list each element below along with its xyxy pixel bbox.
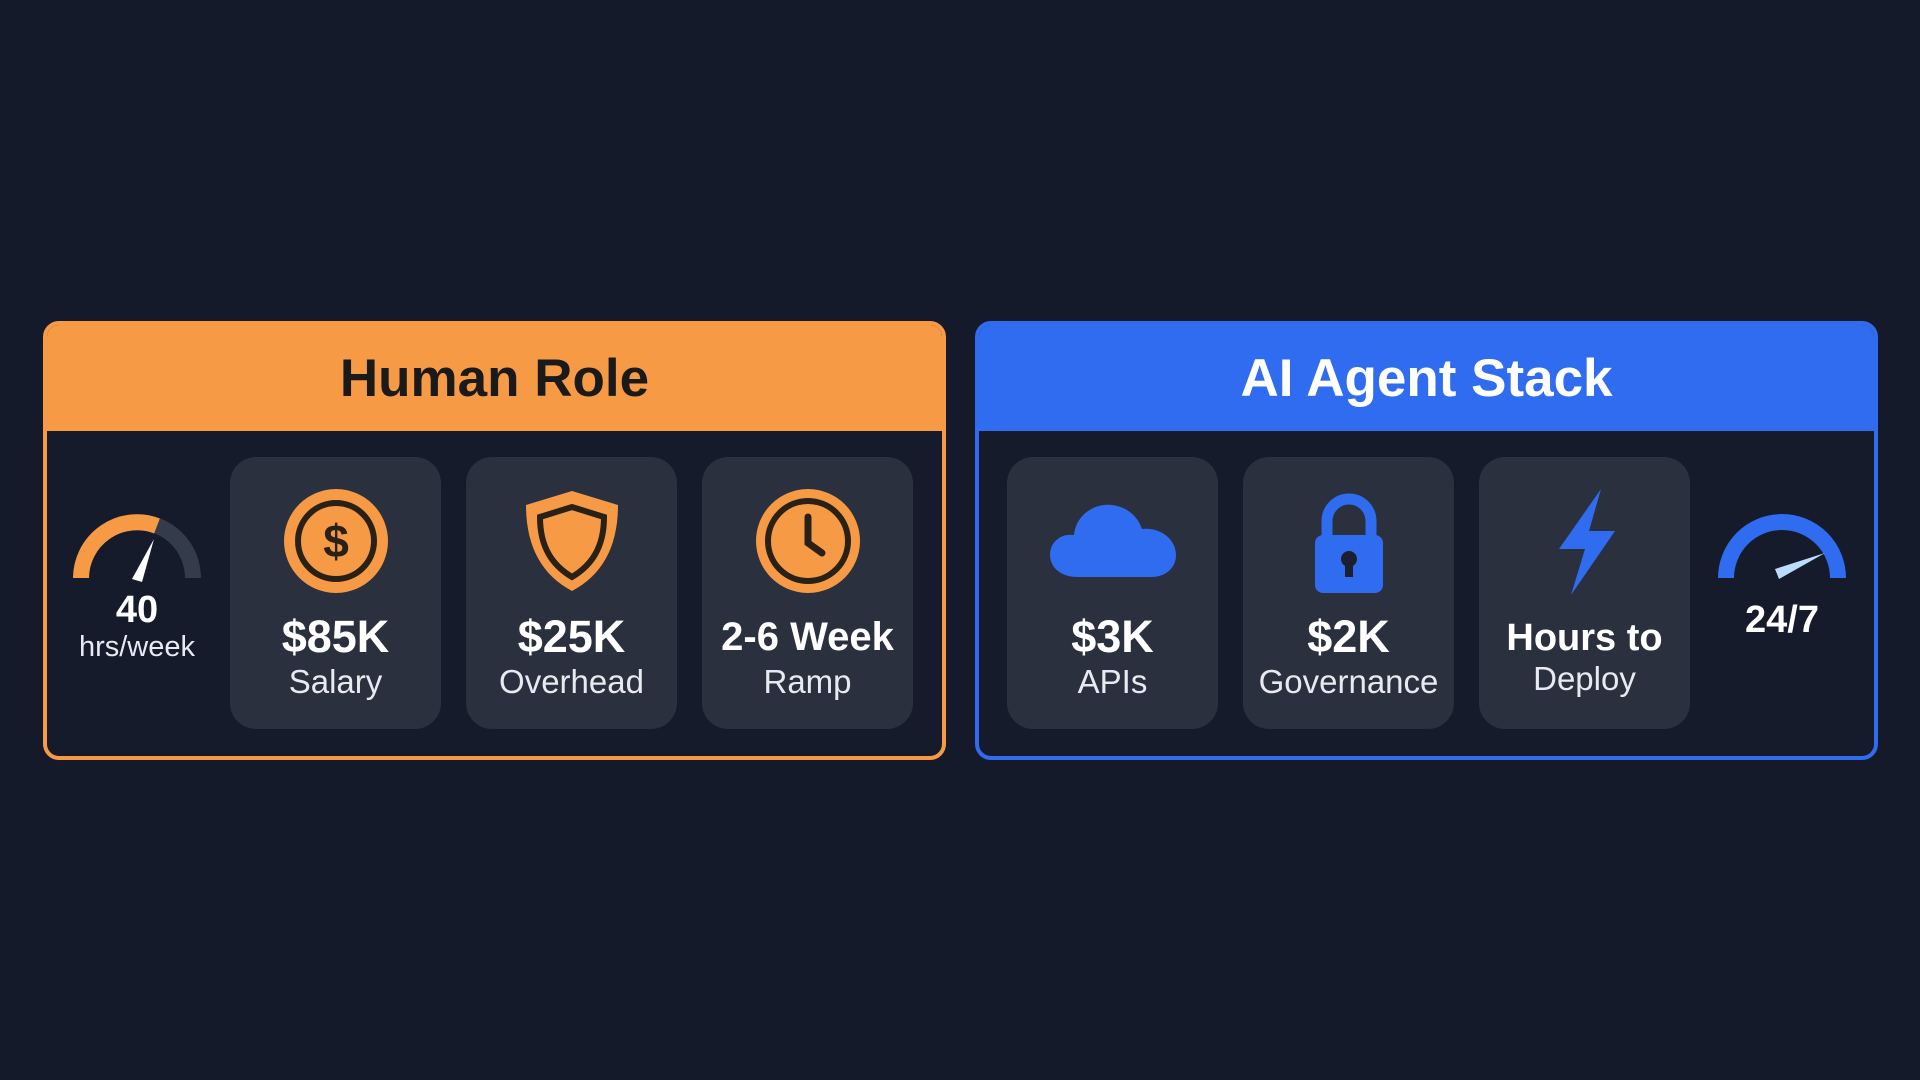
panel: human role <box>43 321 946 760</box>
gauge: 24/7: 24/7 <box>1745 599 1819 641</box>
icon: dollar coin: $ <box>323 515 348 567</box>
card: governance <box>1243 457 1454 729</box>
card: deploy <box>1479 457 1690 729</box>
heading: AI Agent Stack: AI Agent Stack <box>1240 348 1613 408</box>
panel: AI agent stack <box>975 321 1878 760</box>
icon: cloud <box>1050 504 1176 577</box>
card: salary: $85K <box>282 611 389 662</box>
icon: dollar coin <box>284 489 388 593</box>
card: ramp <box>702 457 913 729</box>
card: APIs <box>1007 457 1218 729</box>
card: overhead: Overhead <box>499 663 644 700</box>
card: governance: $2K <box>1307 611 1390 662</box>
gauge: 24/7 <box>1718 514 1846 641</box>
card: governance: Governance <box>1259 663 1438 700</box>
icon: clock <box>756 489 860 593</box>
card: deploy: Hours to <box>1506 617 1663 659</box>
icon: lightning bolt <box>1559 489 1615 595</box>
heading: Human Role: Human Role <box>340 348 649 408</box>
card: overhead <box>466 457 677 729</box>
gauge: 40 hrs/week <box>73 514 201 663</box>
card: APIs: APIs <box>1078 663 1147 700</box>
card: APIs: $3K <box>1071 611 1154 662</box>
card: salary: Salary <box>289 663 382 700</box>
heading: AI Agent Stack <box>979 325 1874 431</box>
card: ramp: Ramp <box>763 663 852 700</box>
card: salary <box>230 457 441 729</box>
heading: Human Role <box>47 325 942 431</box>
gauge: 40 hrs/week: 40 <box>116 589 158 631</box>
icon: padlock <box>1315 494 1383 593</box>
gauge: 40 hrs/week: hrs/week <box>79 631 195 663</box>
card: overhead: $25K <box>518 611 625 662</box>
icon: shield <box>526 491 618 591</box>
card: deploy: Deploy <box>1533 660 1636 697</box>
card: ramp: 2-6 Week <box>721 615 894 659</box>
